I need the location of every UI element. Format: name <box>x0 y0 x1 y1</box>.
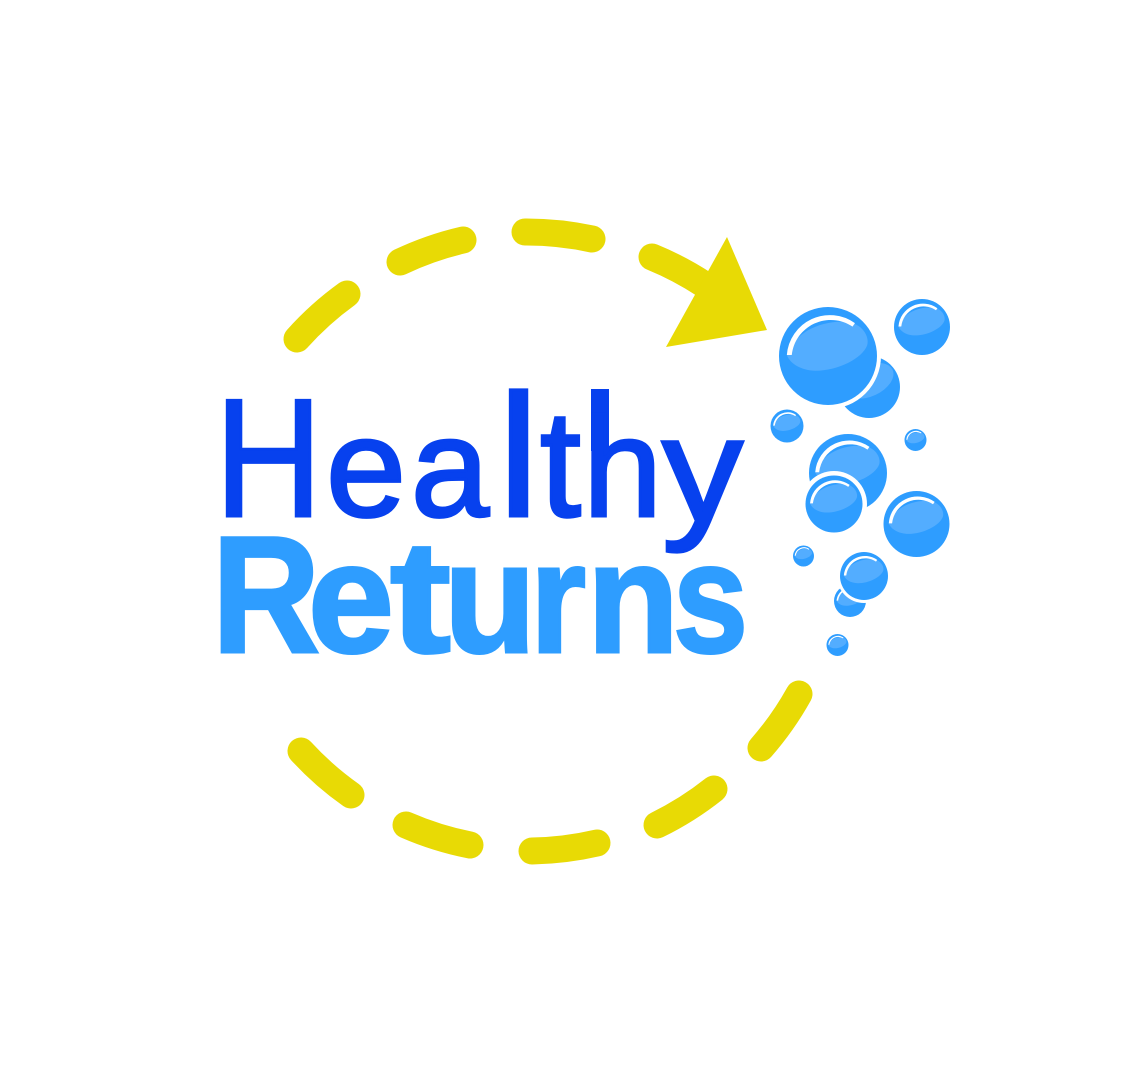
heading: Returns: s <box>673 511 748 686</box>
bubble <box>904 429 926 451</box>
bubble <box>806 476 862 532</box>
bubble <box>834 585 866 617</box>
bubble <box>793 546 814 566</box>
heading: Returns: e <box>308 511 394 686</box>
bubble ring <box>801 471 867 537</box>
bubble <box>840 552 888 600</box>
heading: Healthy: h <box>583 388 662 546</box>
heading: Healthy: e <box>326 388 406 546</box>
bubble ring <box>837 549 891 603</box>
heading: Returns: R <box>212 503 320 688</box>
heading: Healthy: t <box>540 379 581 549</box>
bubble <box>770 410 804 442</box>
heading: Healthy: a <box>411 388 490 546</box>
heading: Returns: r <box>530 511 586 686</box>
bubble <box>826 634 848 656</box>
heading: Returns: u <box>444 511 536 686</box>
h stem extension <box>591 389 609 451</box>
heading: Healthy: l <box>498 358 539 553</box>
heading: Returns: n <box>587 511 679 686</box>
bubble ring <box>775 303 881 409</box>
bubble <box>884 491 950 557</box>
heading: Returns: t <box>390 507 451 686</box>
circular dashed arrow <box>297 232 799 851</box>
heading: Healthy: H <box>215 364 322 552</box>
bubble <box>894 299 950 355</box>
heading: Healthy: y <box>662 385 743 553</box>
bubble behind large bubble <box>838 356 900 418</box>
bubble <box>809 434 887 512</box>
bubble group <box>770 299 950 656</box>
bubble <box>779 307 877 405</box>
